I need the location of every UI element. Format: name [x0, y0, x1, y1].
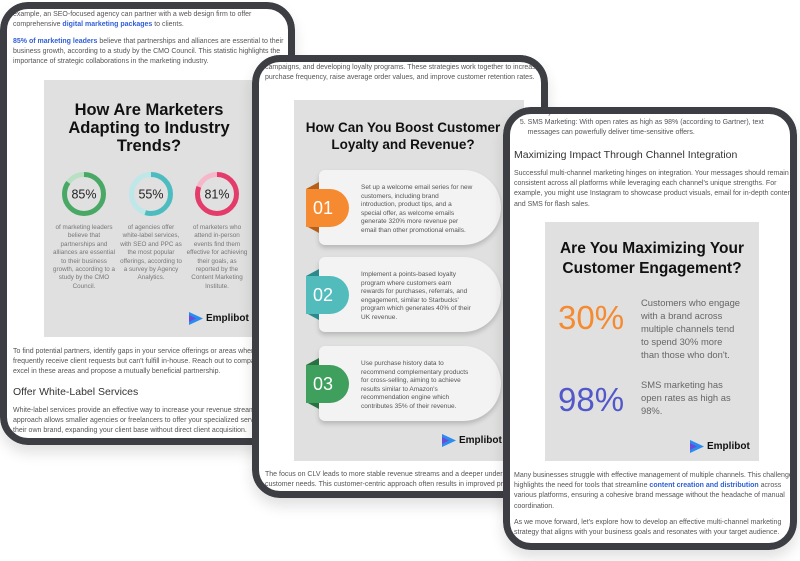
text block: white-label: their own brand, expanding your client base without direct client acquisition.	[13, 427, 247, 434]
stat 98%: SMS marketing has	[641, 379, 723, 390]
text block: find partners: To find potential partners, identify gaps in your service offerings or areas where you	[13, 348, 270, 355]
heading: Adapting to Industry	[68, 119, 230, 137]
heading: Customer Engagement?	[562, 260, 742, 277]
logo	[690, 440, 750, 453]
caption 2: of agencies offer white-label services, with SEO and PPC as the most popular offerings, according to a survey by Agency Analytics.	[120, 224, 182, 281]
panel: marketers adapting	[44, 80, 264, 337]
text block: intro: purchase frequency, raise average order values, and improve customer retention rates.	[265, 74, 535, 81]
text block: statistic	[13, 38, 284, 65]
card 01: customers, including brand	[361, 193, 439, 200]
heading: white-label: Offer White-Label Services	[13, 386, 138, 398]
card 03: for cross-selling, aiming to achieve	[361, 377, 461, 384]
text block: CLV	[265, 470, 537, 488]
stat 30%: multiple channels tend	[641, 323, 734, 334]
caption 1: of marketing leaders believe that partnerships and alliances are essential to their business growth, according to a study by the CMO Council.	[53, 224, 115, 290]
text block: integration: example, you might use Instagram to showcase product visuals, email for in-depth content,	[514, 190, 795, 197]
text block: statistic: 85% of marketing leaders believe that partnerships and alliances are essential to their	[13, 38, 283, 45]
text block: list: 5. SMS Marketing: With open rates as high as 98% (according to Gartner), text	[520, 119, 764, 126]
device: middle tablet	[252, 55, 548, 498]
card 03: results similar to Amazon's	[361, 386, 438, 393]
stat 98%: 98%.	[641, 405, 662, 416]
chart: ring 85%	[62, 172, 106, 216]
card 02: Implement a points-based loyalty	[361, 271, 456, 278]
card 01: special offer, as welcome emails	[361, 210, 454, 217]
text block: next steps	[514, 518, 781, 536]
text block: next steps: As we move forward, let's explore how to develop an effective multi-channel marketing	[514, 519, 781, 526]
heading: How Can You Boost Customer	[306, 120, 500, 135]
text block: integration: and SMS for flash sales.	[514, 201, 590, 208]
text block: find partners	[13, 348, 281, 375]
card 03	[306, 346, 502, 426]
card 01: email than other promotional emails.	[361, 227, 466, 234]
card 01: introduction, product tips, and a	[361, 201, 452, 208]
card 02: UK revenue.	[361, 314, 397, 321]
text block: intro: campaigns, and developing loyalty programs. These strategies work together to increase	[265, 64, 540, 71]
card 02: program where customers earn	[361, 280, 451, 287]
chart: ring 55%	[129, 172, 173, 216]
text block: find partners: frequently receive client requests but can't fulfill in-house. Reach out to companies that	[13, 358, 281, 365]
text block: statistic: importance of strategic collaborations in the marketing industry.	[13, 58, 209, 65]
card 01: 01	[313, 198, 333, 218]
card 01	[306, 170, 502, 250]
text block: white-label: approach allows smaller agencies or freelancers to offer your specialized services under	[13, 417, 286, 424]
card 02: program which generates 40% of their	[361, 305, 471, 312]
text block: white-label	[13, 406, 286, 434]
caption 3: of marketers who attend in-person events find them effective for achieving their goals, as reported by the Content Marketing Institute.	[187, 224, 247, 290]
card 03: 03	[313, 374, 333, 394]
stat 30%: than those who don't.	[641, 349, 730, 360]
text block: list: messages can powerfully deliver time-sensitive offers.	[528, 129, 695, 136]
text block: integration	[514, 170, 795, 208]
stat 98%: open rates as high as	[641, 392, 731, 403]
text block: intro: example, an SEO-focused agency can partner with a web design firm to offer	[13, 11, 251, 18]
device: right tablet	[503, 107, 797, 550]
heading	[68, 101, 230, 155]
stat 98%	[558, 379, 731, 418]
text block: CLV: customer needs. This customer-centric approach often results in improved profitability.	[265, 481, 532, 488]
chart: ring 55%: 55%	[138, 188, 164, 202]
text block: challenge	[514, 472, 793, 510]
logo: Emplibot	[206, 313, 249, 324]
chart: ring 85%: 85%	[71, 188, 97, 202]
card 02	[306, 257, 502, 337]
text block: list	[520, 109, 764, 136]
text block: challenge: coordination.	[514, 503, 554, 510]
text block: challenge: highlights the need for tools that streamline content creation and distribution across	[514, 482, 781, 489]
card 02: engagement, similar to Starbucks'	[361, 297, 459, 304]
card 03: contributes 35% of their revenue.	[361, 403, 456, 410]
text block: integration: consistent across all platforms while leveraging each channel's unique strengths. For	[514, 180, 776, 187]
panel: engagement	[545, 222, 759, 461]
heading: How Are Marketers	[75, 101, 223, 119]
text block: challenge: Many businesses struggle with effective management of multiple channels. This challenge	[514, 472, 793, 479]
text block: integration: Successful multi-channel marketing hinges on integration. Your messages should remain	[514, 170, 789, 177]
heading: channel integration: Maximizing Impact Through Channel Integration	[514, 149, 737, 161]
heading	[306, 120, 500, 152]
stat 30%: Customers who engage	[641, 297, 740, 308]
text block: list: visibility.	[528, 109, 553, 116]
card 03: Use purchase history data to	[361, 360, 444, 367]
text block: find partners: excel in these areas and propose a mutually beneficial partnership.	[13, 368, 220, 375]
heading: Loyalty and Revenue?	[331, 136, 475, 152]
heading: Trends?	[117, 137, 181, 155]
text block: statistic: business growth, according to a study by the CMO Council. This statistic highlights the	[13, 48, 280, 55]
chart: ring 81%	[195, 172, 239, 216]
card 02: rewards for purchases, referrals, and	[361, 288, 467, 295]
logo: Emplibot	[707, 441, 750, 452]
text block: white-label: White-label services provide an effective way to increase your revenue streams. This	[13, 407, 275, 414]
stat 30%: to spend 30% more	[641, 336, 722, 347]
text block: next steps: strategy that aligns with your business goals and resonates with your target audience.	[514, 529, 779, 536]
logo	[442, 434, 502, 447]
logo	[189, 312, 249, 325]
stat 98%: 98%	[558, 381, 624, 418]
stat 30%: with a brand across	[641, 310, 722, 321]
card 01: generate 320% more revenue per	[361, 218, 458, 225]
heading: Are You Maximizing Your	[560, 240, 744, 257]
card 01: Set up a welcome email series for new	[361, 184, 472, 191]
text block: challenge: various platforms, ensuring a cohesive brand message without the headache of manual	[514, 492, 785, 499]
device: left tablet	[0, 2, 295, 445]
text block: intro	[265, 55, 540, 81]
heading	[560, 240, 744, 277]
card 03: recommend complementary products	[361, 369, 468, 376]
logo: Emplibot	[459, 435, 502, 446]
text block: intro	[13, 10, 252, 28]
card 02: 02	[313, 285, 333, 305]
text block: CLV: The focus on CLV leads to more stable revenue streams and a deeper understanding of	[265, 471, 537, 478]
card 03: recommendation engine which	[361, 394, 449, 401]
text block: intro: comprehensive digital marketing packages to clients.	[13, 21, 184, 28]
stat 30%: 30%	[558, 299, 624, 336]
panel: boost loyalty	[294, 100, 524, 461]
stat 30%	[558, 297, 740, 360]
chart: ring 81%: 81%	[204, 188, 230, 202]
